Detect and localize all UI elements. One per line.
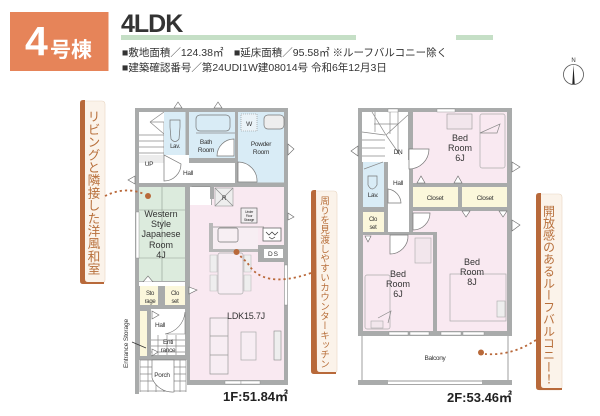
- callout: kitchen: [311, 190, 337, 374]
- room: bedroom 8J: Bed: [464, 257, 480, 267]
- room: bath: Bath: [200, 139, 213, 146]
- closets first floor: Sto: [146, 291, 155, 297]
- room: lavatory 2F: [363, 162, 384, 207]
- closets 2F: Closet: [477, 195, 494, 202]
- property details: ■敷地面積／124.38㎡ ■延床面積／95.58㎡ ※ルーフバルコニー除く: [122, 46, 447, 59]
- doors upper floor one: [164, 139, 257, 205]
- floor area: first floor: 1F:51.84㎡: [223, 389, 288, 404]
- windows: [136, 212, 288, 384]
- closets 2F: Closet: [427, 195, 444, 202]
- porch: [139, 360, 186, 392]
- room: lavatory 1F: Lav.: [170, 144, 180, 150]
- floor plan: second floor: [351, 108, 520, 385]
- room: bedroom top 6J: [413, 112, 507, 183]
- title: 4LDK: [121, 10, 183, 38]
- dining table: [210, 253, 251, 294]
- connector: Western room: [105, 190, 151, 199]
- room: powder: W: [246, 121, 253, 128]
- room: bedroom lower 6J: Bed: [390, 269, 406, 279]
- hall and entrance: Enti: [163, 339, 173, 346]
- callout: Western room: [80, 100, 105, 284]
- badge: building number: 号棟: [50, 39, 92, 62]
- title underline: [121, 35, 493, 40]
- badge: building number: [10, 12, 108, 71]
- TV board: [274, 331, 281, 360]
- room: western style Japanese room: 4J: [156, 250, 166, 260]
- property details: [122, 46, 447, 74]
- connector: kitchen: [234, 249, 311, 279]
- walls: second floor: [358, 108, 512, 336]
- underfloor storage: Under: [245, 210, 254, 214]
- closet 2F: Clo: [369, 217, 378, 223]
- room: western style Japanese room: Room: [149, 240, 173, 250]
- underfloor storage: [241, 208, 257, 223]
- room: bedroom lower 6J: Room: [386, 279, 410, 289]
- callout: kitchen: 周りを見渡しやすいカウンターキッチン: [318, 196, 332, 369]
- windows 2F: [388, 109, 484, 335]
- hall and entrance: rance: [161, 347, 176, 354]
- property details: ■建築確認番号／第24UDI1W建08014号 令和6年12月3日: [122, 61, 387, 74]
- room: bath: Room: [198, 147, 214, 154]
- room: western style Japanese room: Western: [144, 209, 178, 219]
- room: bath: [189, 112, 235, 158]
- closets first floor: rage: [145, 299, 156, 305]
- stairs and hall 2F: Hall: [393, 180, 404, 187]
- icon: ventilation box: R: [222, 196, 227, 202]
- room: bedroom 8J: 8J: [467, 277, 477, 287]
- room: powder: [238, 112, 284, 182]
- stairs and hall 2F: [362, 112, 409, 232]
- room: western style Japanese room: Japanese: [141, 229, 181, 239]
- LDK label: LDK15.7J: [227, 311, 265, 321]
- room: lavatory 2F: Lav.: [368, 192, 379, 199]
- closet 2F: set: [369, 225, 377, 231]
- stairs and hall: UP: [145, 161, 153, 168]
- icon: ventilation box: [215, 188, 233, 206]
- closets first floor: Clo: [171, 291, 180, 297]
- icon: north compass: [564, 58, 584, 84]
- stairs and hall 2F: DN: [394, 149, 403, 156]
- room: bedroom 8J: [413, 211, 507, 331]
- walls: first floor: [135, 108, 288, 394]
- icon: north compass: N: [571, 58, 576, 64]
- hall and entrance: [151, 309, 185, 355]
- room: bedroom top 6J: 6J: [455, 153, 465, 163]
- entrance storage room: Entrance Storage: [123, 319, 130, 368]
- room: powder: Powder: [251, 141, 272, 148]
- stairs and hall: [139, 112, 235, 183]
- underfloor storage: Storage: [244, 218, 254, 222]
- balcony: Balcony: [424, 355, 447, 362]
- low table: [241, 332, 256, 360]
- room: bedroom top 6J: Bed: [452, 133, 468, 143]
- window and door markers 1F: [128, 102, 294, 356]
- room: bedroom lower 6J: [363, 235, 433, 331]
- stairs and hall: Hall: [183, 170, 194, 177]
- closets 2F: [413, 187, 507, 207]
- room: western style Japanese room: Style: [151, 219, 171, 229]
- connector: balcony: [478, 340, 536, 356]
- room: bedroom top 6J: Room: [448, 143, 472, 153]
- balcony: [358, 336, 512, 385]
- entrance storage room: [123, 311, 147, 368]
- floor plan: first floor: [123, 102, 294, 394]
- closets first floor: set: [171, 299, 179, 305]
- window and door markers 2F: [351, 146, 520, 242]
- porch: Porch: [154, 372, 170, 379]
- hall and entrance: Hall: [155, 322, 166, 329]
- DS closet: [258, 245, 284, 262]
- closet 2F: [363, 212, 384, 232]
- room: bedroom lower 6J: 6J: [393, 289, 403, 299]
- underfloor storage: Floor: [246, 214, 253, 218]
- sofa: [210, 318, 228, 374]
- callout: balcony: 開放感のあるルーフバルコニー！: [540, 205, 558, 385]
- callout: Western room: リビングと隣接した洋風和室: [84, 110, 104, 276]
- doors second floor: [388, 149, 430, 254]
- DS closet: DS: [268, 251, 279, 258]
- room: powder: Room: [253, 149, 269, 156]
- kitchen counter: [209, 223, 281, 252]
- room: LDK: [190, 187, 284, 380]
- floor area: second floor: 2F:53.46㎡: [447, 390, 512, 405]
- room: bedroom 8J: Room: [460, 267, 484, 277]
- badge: building number: 4: [25, 18, 48, 64]
- room: western style Japanese room: [139, 187, 185, 282]
- closets first floor: [139, 282, 185, 305]
- callout: balcony: [536, 193, 562, 390]
- room: lavatory 1F: [164, 112, 186, 155]
